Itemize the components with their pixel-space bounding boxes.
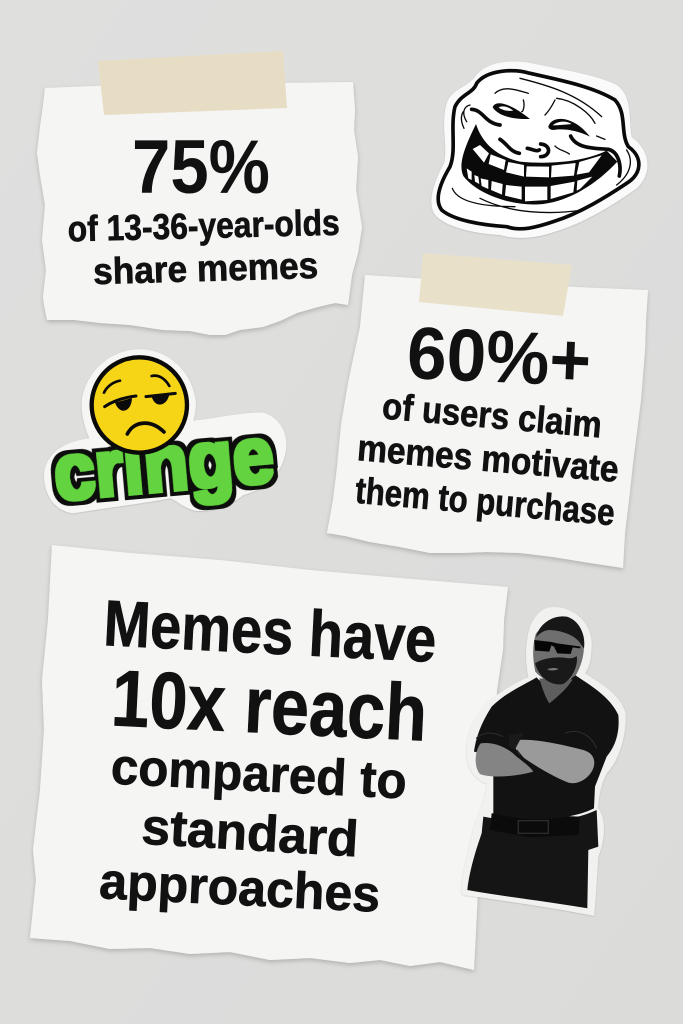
stat: 75%: 75%: [132, 125, 270, 210]
panel: 10x reach note: [30, 545, 508, 970]
eyes: [493, 103, 530, 119]
text: approaches: approaches: [98, 852, 382, 923]
icon: cringe sticker: [44, 349, 286, 517]
neck: [539, 678, 573, 703]
text: Memes have: Memes have: [102, 586, 438, 676]
text: share memes: share memes: [93, 245, 319, 292]
teeth: [467, 145, 602, 201]
icon: troll face sticker: [431, 61, 647, 238]
icon: man with crossed arms sticker: [461, 607, 626, 916]
tape 1: [98, 51, 287, 115]
pants and belt: [467, 810, 598, 908]
text: of users claim: of users claim: [381, 386, 603, 446]
word: cringe: cringe: [50, 409, 277, 517]
panel: 75% stat note: [37, 51, 362, 335]
mouth: [461, 124, 617, 204]
face: [92, 357, 187, 453]
hair: [536, 616, 584, 648]
text: standard: standard: [140, 798, 360, 867]
tape 2: [419, 253, 572, 316]
torso shirt: [474, 675, 619, 819]
paper: torn note 1: [37, 82, 362, 335]
stat: 60%+: 60%+: [405, 311, 593, 402]
head: [533, 625, 584, 682]
beard: [535, 656, 577, 684]
panel: 60%+ stat note: [327, 253, 648, 568]
crossed arms: [476, 743, 533, 776]
text: compared to: compared to: [110, 738, 408, 809]
text: 10x reach: 10x reach: [109, 653, 429, 758]
text: them to purchase: them to purchase: [354, 470, 616, 533]
sunglasses: [534, 640, 581, 654]
text: memes motivate: memes motivate: [356, 427, 620, 490]
facial lines: [452, 78, 630, 213]
paper: torn note 3: [30, 545, 508, 970]
text: of 13-36-year-olds: of 13-36-year-olds: [67, 202, 340, 249]
sticker border: [461, 607, 626, 916]
paper: torn note 2: [327, 275, 648, 568]
